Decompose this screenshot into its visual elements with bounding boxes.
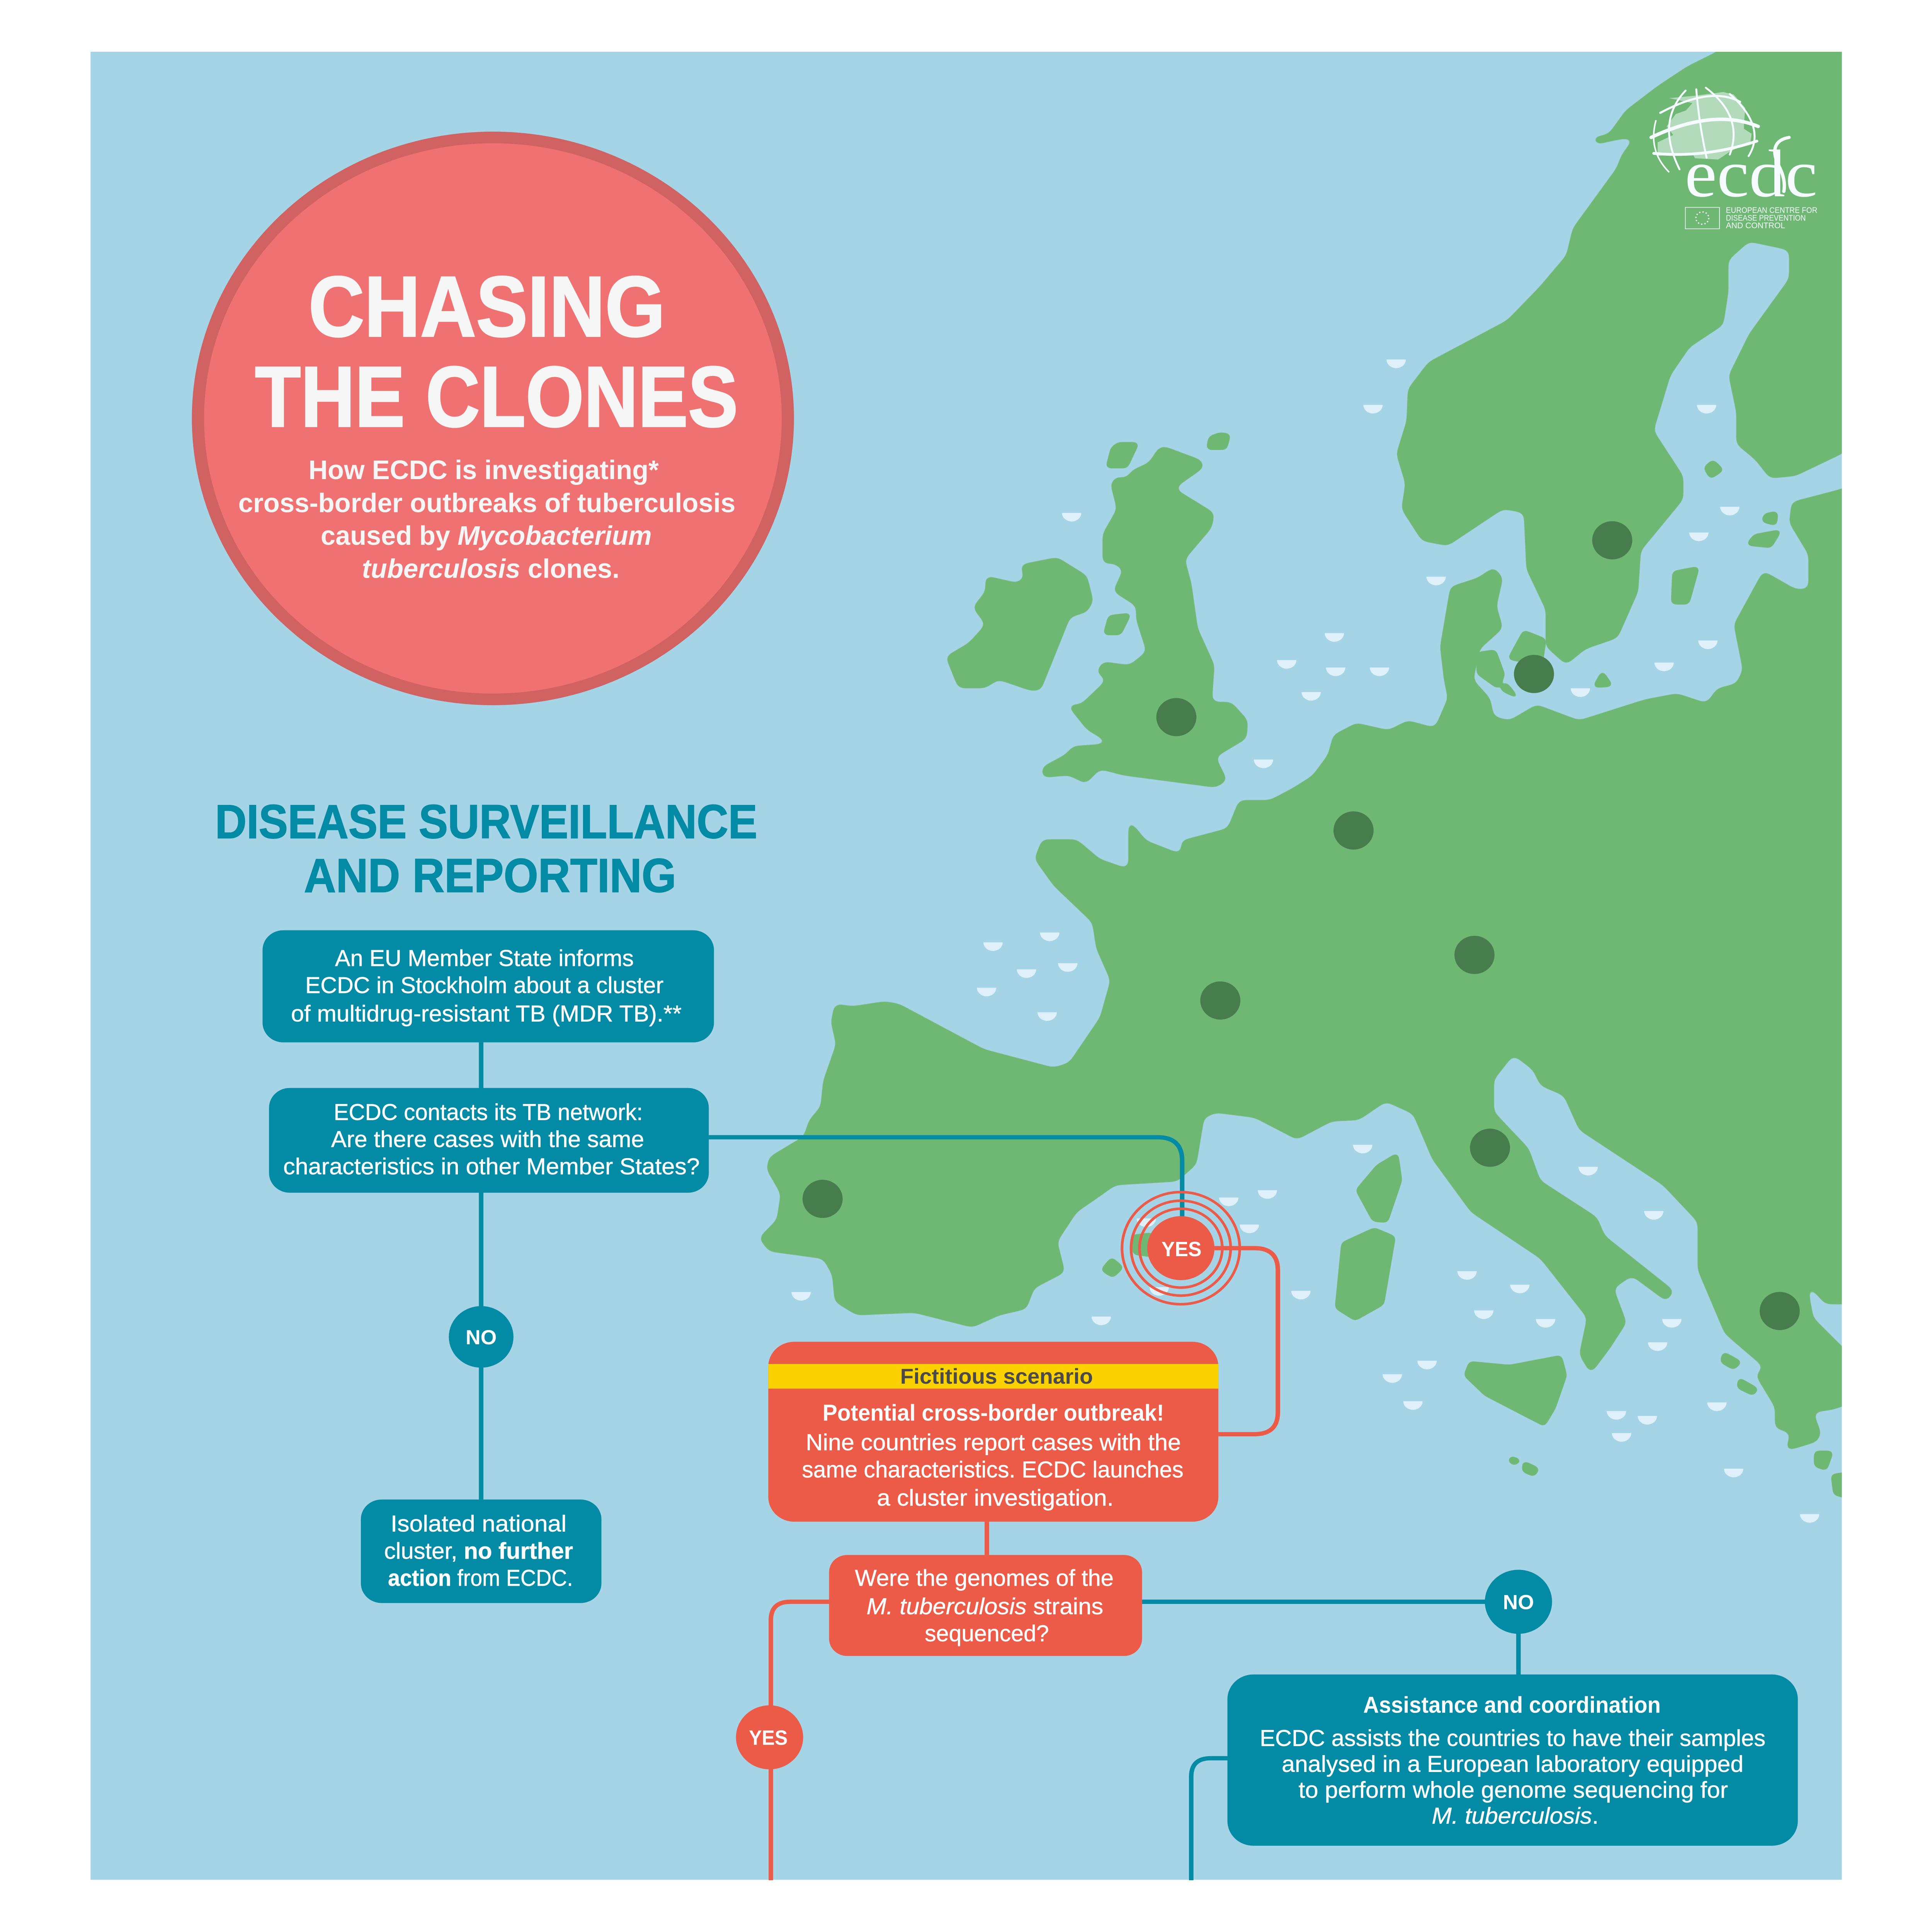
map of Europe	[759, 31, 1867, 1503]
box: assistance and coordination: ECDC assists the countries to have their samples	[1260, 1725, 1765, 1751]
box: ECDC contacts network: ECDC contacts its TB network:	[334, 1099, 643, 1125]
land: continental Europe	[759, 481, 1867, 1452]
subtitle: cross-border outbreaks of tuberculosis	[238, 488, 735, 518]
map markers and flowchart	[263, 521, 1800, 1880]
box: isolated national cluster: cluster, no further	[384, 1538, 573, 1563]
logo: agency name: AND CONTROL	[1726, 221, 1785, 230]
YES badge	[736, 1705, 803, 1769]
box: genomes sequenced question	[829, 1555, 1142, 1656]
box: ECDC contacts network: characteristics in other Member States?	[283, 1153, 700, 1179]
logo: globe	[1651, 88, 1758, 172]
title: THE CLONES	[255, 349, 738, 445]
logo: agency name: DISEASE PREVENTION	[1726, 213, 1806, 223]
connector: genomes to YES	[771, 1602, 829, 1880]
connector: genomes to NO	[1142, 1602, 1519, 1676]
box: assistance and coordination: analysed in a European laboratory equipped	[1282, 1751, 1743, 1777]
box: isolated national cluster	[361, 1500, 601, 1603]
banner: fictitious scenario	[768, 1364, 1218, 1389]
subtitle: caused by Mycobacterium	[321, 520, 652, 551]
logo: agency name	[1726, 206, 1817, 230]
box: potential cross-border outbreak: Potential cross-border outbreak!	[823, 1400, 1164, 1425]
box: EU Member State informs	[263, 930, 714, 1043]
box: isolated national cluster: Isolated national	[391, 1511, 566, 1536]
box: EU Member State informs: An EU Member State informs	[335, 945, 634, 971]
box: genomes sequenced question: M. tuberculosis strains	[867, 1594, 1103, 1619]
title circle	[198, 138, 788, 699]
NO badge	[449, 1306, 514, 1368]
sea waves	[791, 359, 1819, 1523]
box: ECDC contacts network: Are there cases with the same	[331, 1126, 644, 1152]
land: northern and Baltic islands	[1104, 433, 1781, 699]
connector: assistance box to next step	[1191, 1758, 1228, 1880]
box: genomes sequenced question: sequenced?	[925, 1621, 1049, 1646]
subtitle: How ECDC is investigating*	[308, 455, 659, 485]
land masses	[759, 31, 1867, 1452]
logo: ecdc wordmark: ecdc	[1685, 136, 1817, 211]
NO badge	[1485, 1570, 1552, 1634]
section heading: DISEASE SURVEILLANCE	[215, 795, 757, 848]
title: CHASING	[308, 259, 665, 355]
connector: network to YES	[709, 1137, 1182, 1226]
islands	[1101, 433, 1867, 1503]
YES target badge: YES	[1162, 1237, 1202, 1261]
box: potential cross-border outbreak: a cluster investigation.	[877, 1485, 1114, 1510]
land: Great Britain	[1042, 447, 1248, 788]
NO badge: NO	[1503, 1591, 1534, 1614]
country dots	[803, 521, 1800, 1330]
logo: agency name: EUROPEAN CENTRE FOR	[1726, 206, 1817, 215]
YES target badge	[1122, 1192, 1240, 1304]
subtitle	[238, 455, 735, 584]
NO badge: NO	[466, 1326, 497, 1349]
box: assistance and coordination: to perform whole genome sequencing for	[1299, 1777, 1728, 1803]
land: Scandinavia	[1396, 31, 1867, 665]
box: assistance and coordination	[1228, 1675, 1798, 1846]
section heading	[215, 795, 757, 902]
subtitle: tuberculosis clones.	[362, 554, 619, 584]
box: potential cross-border outbreak	[768, 1342, 1218, 1522]
section heading: AND REPORTING	[304, 849, 676, 902]
land: Mediterranean islands	[1101, 1153, 1867, 1503]
connector: box 1 to isolated cluster	[480, 1043, 482, 1500]
box: assistance and coordination: Assistance and coordination	[1363, 1692, 1661, 1718]
box: EU Member State informs: of multidrug-resistant TB (MDR TB).**	[291, 1001, 682, 1026]
ECDC logo	[1651, 88, 1817, 230]
box: potential cross-border outbreak: same characteristics. ECDC launches	[802, 1457, 1184, 1482]
land: Ireland	[946, 557, 1094, 691]
box: potential cross-border outbreak: Nine countries report cases with the	[806, 1430, 1181, 1455]
box: assistance and coordination: M. tuberculosis.	[1432, 1803, 1599, 1828]
box: EU Member State informs: ECDC in Stockholm about a cluster	[305, 972, 663, 998]
box: ECDC contacts network	[269, 1088, 709, 1193]
YES badge: YES	[749, 1726, 788, 1749]
circle badge	[198, 138, 788, 699]
connector: YES to outbreak box	[1214, 1248, 1278, 1434]
title	[255, 259, 738, 445]
box: isolated national cluster: action from ECDC.	[388, 1565, 573, 1591]
banner: fictitious scenario: Fictitious scenario	[900, 1364, 1093, 1389]
connector: outbreak to genomes question	[986, 1522, 988, 1555]
logo: EU flag	[1685, 207, 1719, 229]
logo: d swash	[1775, 138, 1789, 191]
box: genomes sequenced question: Were the genomes of the	[855, 1565, 1114, 1591]
